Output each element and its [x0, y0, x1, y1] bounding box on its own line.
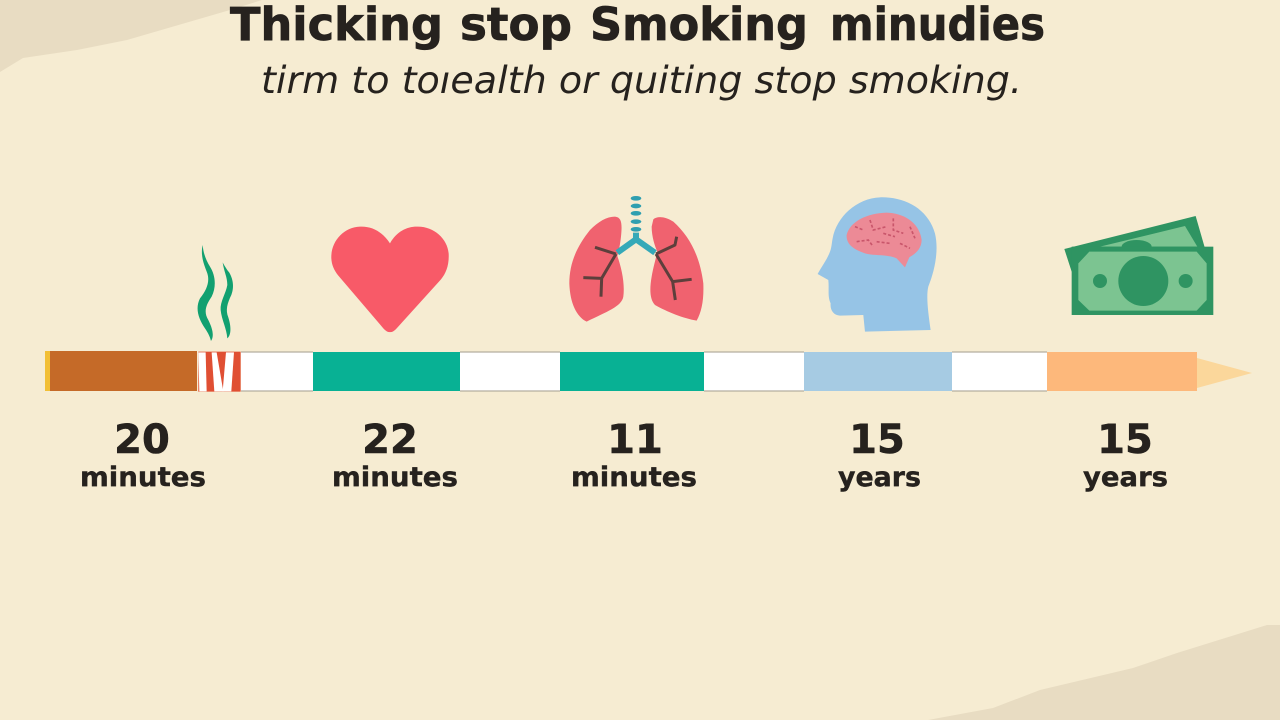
cigarette red band: [198, 352, 241, 392]
label: 15 years: [838, 417, 921, 493]
icon: banknotes: [1064, 216, 1213, 315]
label: 20 minutes: 20: [114, 417, 170, 463]
label: 11 minutes: 11: [607, 417, 663, 463]
label: 15 years (final): 15: [1097, 417, 1153, 463]
icon: heart: [331, 227, 449, 332]
icon: head with brain: [818, 197, 937, 332]
label: 11 minutes: minutes: [571, 462, 697, 493]
label: 22 minutes: 22: [362, 417, 418, 463]
icon: lungs: [569, 196, 703, 322]
label: 22 minutes: minutes: [332, 462, 458, 493]
label: 15 years: 15: [849, 417, 905, 463]
cigarette timeline bar: [45, 351, 1252, 392]
label: 20 minutes: minutes: [80, 462, 206, 493]
label: 15 years (final): years: [1083, 462, 1168, 493]
subtitle: tirm to toıealth or quiting stop smoking.: [261, 59, 1022, 102]
label: 15 years (final): [1083, 417, 1168, 493]
label: 15 years: years: [838, 462, 921, 493]
label: 20 minutes: [80, 417, 206, 493]
label: 11 minutes: [571, 417, 697, 493]
icon: smoke: [198, 245, 233, 341]
title: [230, 0, 1045, 51]
label: 22 minutes: [332, 417, 458, 493]
